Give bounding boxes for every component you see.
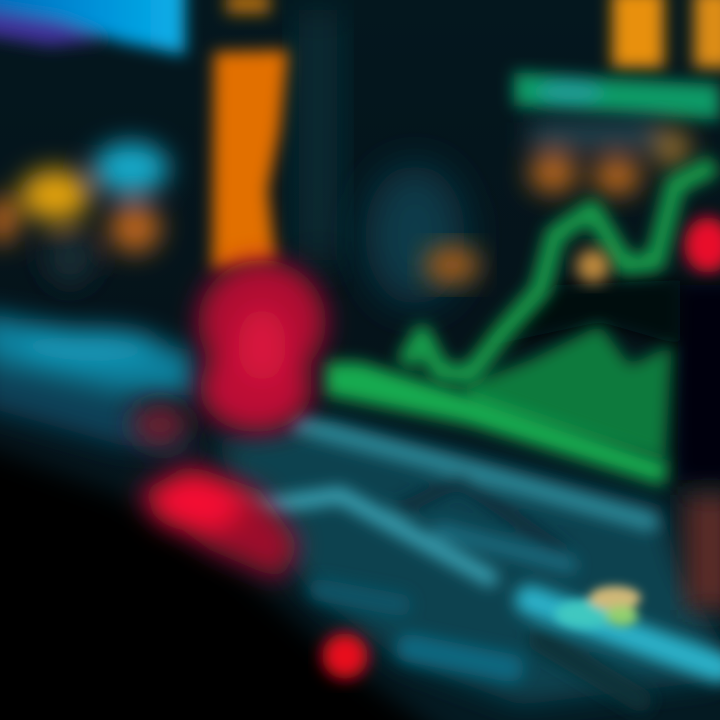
left lights <box>0 142 169 286</box>
red marker right <box>684 217 720 273</box>
tall orange bar <box>212 0 288 270</box>
red streak lower-left <box>132 403 300 580</box>
dim teal column <box>298 10 338 260</box>
red central blob <box>198 260 326 432</box>
orange chart dot <box>576 249 610 283</box>
dark lower-left wedge <box>0 440 460 720</box>
right lower rust area <box>685 495 720 610</box>
top-right green bar <box>514 72 720 120</box>
top-right candle marks <box>529 122 690 195</box>
green price line <box>405 165 715 375</box>
black wedge under chart <box>470 280 680 350</box>
dark right block <box>678 285 720 480</box>
top-left blue panel <box>0 0 185 55</box>
central dark teal blob <box>365 165 465 305</box>
green area chart <box>465 325 672 460</box>
small orange glow <box>424 245 480 285</box>
green chart band <box>325 362 668 486</box>
lower light streaks <box>225 425 720 700</box>
red dot <box>322 633 368 679</box>
lower teal field <box>215 420 720 705</box>
top-right orange bars <box>612 0 720 68</box>
rainbow highlight <box>555 586 641 628</box>
lower-left cyan strip <box>0 312 200 450</box>
